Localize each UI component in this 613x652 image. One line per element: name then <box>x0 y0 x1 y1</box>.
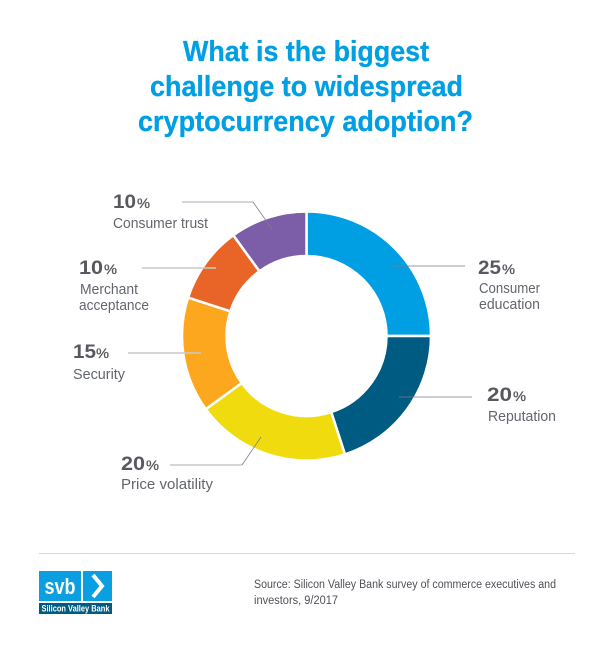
label: price volatility: % <box>146 457 159 473</box>
segment: consumer trust 10% <box>233 212 306 271</box>
label: merchant acceptance: 10 <box>79 258 103 279</box>
segment: reputation 20% <box>331 336 431 454</box>
label: consumer trust <box>113 192 208 232</box>
label: reputation <box>487 385 556 425</box>
leader line: security <box>128 352 201 354</box>
label: consumer education: % <box>502 261 515 277</box>
title: What is the biggest <box>183 36 429 68</box>
source note: Source: Silicon Valley Bank survey of commerce executives and <box>254 579 556 591</box>
leader line: consumer trust <box>182 202 272 229</box>
leader line: merchant acceptance <box>142 267 216 269</box>
label: reputation: Reputation <box>488 409 556 425</box>
leader line: consumer education <box>391 265 465 267</box>
label: merchant acceptance: acceptance <box>79 298 149 314</box>
logo: Silicon Valley Bank: Silicon Valley Bank <box>42 604 110 614</box>
label: price volatility: 20 <box>121 454 145 475</box>
label: reputation: 20 <box>487 385 512 406</box>
label: reputation: % <box>513 388 526 404</box>
logo: Silicon Valley Bank <box>39 571 112 614</box>
label: consumer education: 25 <box>478 258 501 279</box>
label: consumer education: education <box>479 297 540 313</box>
label: merchant acceptance: % <box>104 261 117 277</box>
segment: consumer education 25% <box>306 212 431 336</box>
label: price volatility <box>121 454 214 493</box>
label: consumer trust: Consumer trust <box>113 216 208 232</box>
label: consumer trust: % <box>137 195 150 211</box>
label: merchant acceptance <box>79 258 149 314</box>
label: security: Security <box>73 367 126 383</box>
segment: merchant acceptance 10% <box>188 235 259 311</box>
title: challenge to widespread <box>150 71 463 103</box>
leader line: price volatility <box>170 437 261 465</box>
label: merchant acceptance: Merchant <box>80 282 138 298</box>
logo: Silicon Valley Bank: svb <box>44 574 76 599</box>
label: consumer education: Consumer <box>479 281 540 297</box>
source note: investors, 9/2017 <box>254 595 338 607</box>
label: security: 15 <box>73 342 96 363</box>
leader line: reputation <box>399 396 472 398</box>
title: cryptocurrency adoption? <box>138 106 473 138</box>
label: consumer trust: 10 <box>113 192 136 213</box>
donut chart <box>182 212 431 461</box>
label: price volatility: Price volatility <box>121 477 214 493</box>
segment: security 15% <box>182 298 242 409</box>
label: consumer education <box>478 258 540 313</box>
title <box>138 36 473 138</box>
source note <box>254 579 556 607</box>
segment: price volatility 20% <box>206 383 345 461</box>
label: security <box>73 342 126 383</box>
label: security: % <box>96 345 109 361</box>
